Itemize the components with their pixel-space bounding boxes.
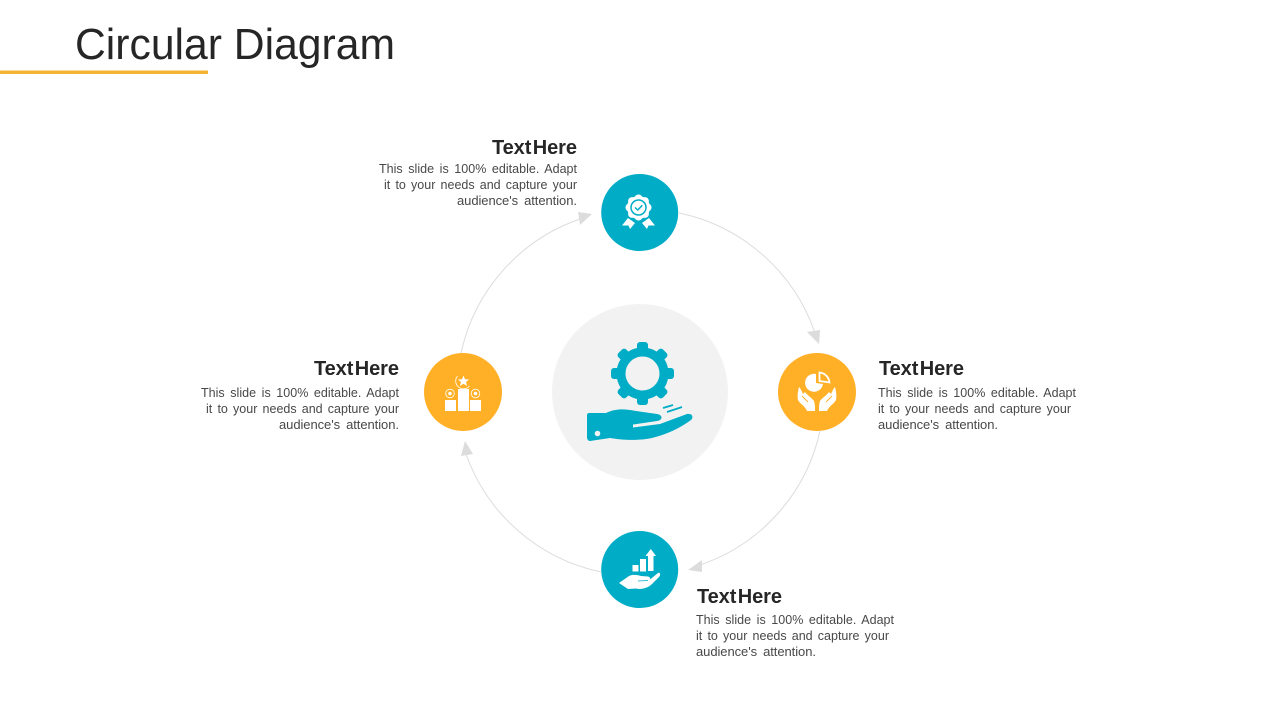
icon: hands holding pie chart bbox=[798, 372, 836, 411]
arrow: right to bottom bbox=[688, 431, 820, 572]
title: Circular Diagram bbox=[75, 20, 395, 69]
arrow: left to top bbox=[461, 212, 592, 353]
text block: left bbox=[201, 358, 400, 432]
title underline bbox=[0, 70, 208, 74]
center hub bbox=[552, 304, 728, 480]
text block: top: This slide is 100% editable. Adapt bbox=[379, 162, 578, 176]
node: right bbox=[778, 353, 856, 431]
text block: right: audience's attention. bbox=[878, 417, 998, 432]
text block: top: it to your needs and capture your bbox=[384, 178, 577, 192]
cycle arrows bbox=[461, 212, 820, 572]
text block: left: it to your needs and capture your bbox=[206, 402, 399, 416]
text block: left: This slide is 100% editable. Adapt bbox=[201, 386, 400, 400]
text block: right: This slide is 100% editable. Adapt bbox=[878, 386, 1077, 400]
text block: right: it to your needs and capture your bbox=[878, 402, 1071, 416]
icon: gear bbox=[611, 342, 674, 405]
text block: top: audience's attention. bbox=[457, 193, 577, 208]
text block: top: Text Here bbox=[492, 137, 577, 159]
text block: bottom bbox=[696, 586, 895, 659]
icon: podium with star bbox=[445, 376, 481, 411]
text block: bottom: audience's attention. bbox=[696, 644, 816, 659]
text block: bottom: Text Here bbox=[697, 586, 782, 608]
text block: bottom: This slide is 100% editable. Adapt bbox=[696, 613, 895, 627]
icon: open hand bbox=[587, 405, 692, 441]
text block: right: Text Here bbox=[879, 358, 964, 380]
icon: hand with growth chart bbox=[619, 549, 660, 589]
node: top bbox=[601, 174, 678, 251]
arrow: bottom to left bbox=[461, 441, 601, 572]
node: left bbox=[424, 353, 502, 431]
text block: right bbox=[878, 358, 1077, 432]
text block: top bbox=[379, 137, 578, 208]
node: bottom bbox=[601, 531, 678, 608]
icon: award badge bbox=[622, 194, 655, 229]
text block: left: Text Here bbox=[314, 358, 399, 380]
text block: left: audience's attention. bbox=[279, 417, 399, 432]
text block: bottom: it to your needs and capture your bbox=[696, 629, 889, 643]
arrow: top to right bbox=[679, 213, 820, 344]
